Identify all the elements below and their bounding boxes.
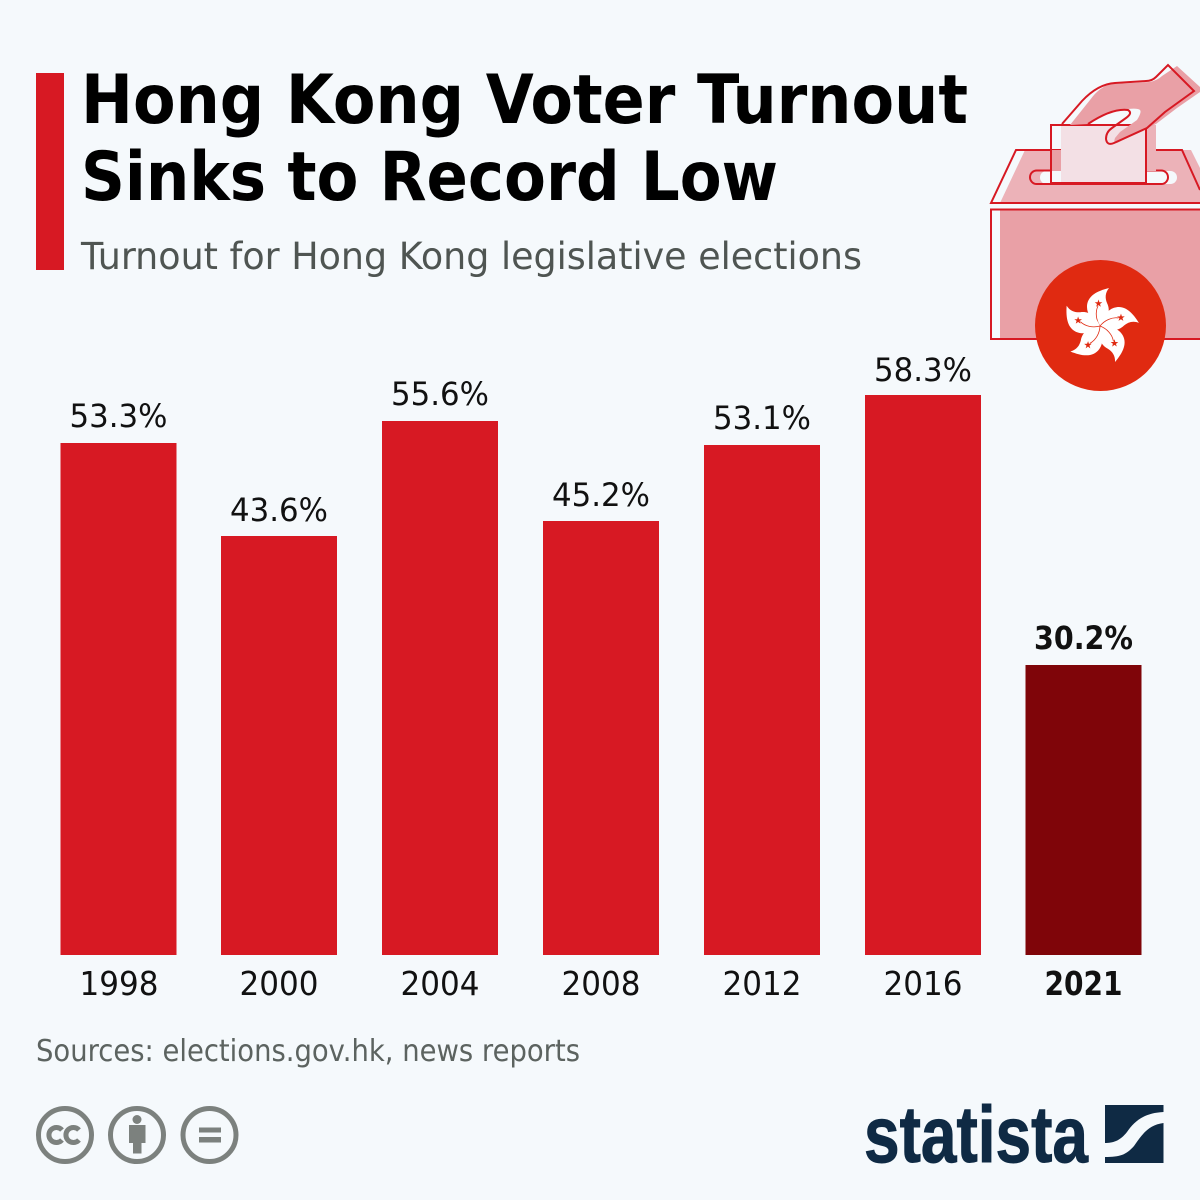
icon: attribution xyxy=(110,1108,164,1162)
bar: 2008: 45.2% xyxy=(552,476,650,514)
hand xyxy=(1062,65,1200,144)
bar: 2008: 2008 xyxy=(562,964,640,1003)
bar: 2000: 43.6% xyxy=(230,491,328,529)
bar: 2000: 2000 xyxy=(240,964,318,1003)
bar: 2016 xyxy=(865,351,981,1003)
statista logo xyxy=(864,1090,1164,1179)
subtitle: Turnout for Hong Kong legislative elections xyxy=(80,235,862,278)
bar: 2004: 55.6% xyxy=(391,375,489,413)
ballot slot xyxy=(1030,170,1177,184)
ballot paper xyxy=(1051,125,1156,183)
ballot box body xyxy=(991,210,1200,339)
icon: creative commons licence xyxy=(38,1108,236,1162)
bar: 2016: 58.3% xyxy=(874,351,972,389)
bar: 2021: 2021 xyxy=(1044,964,1122,1003)
ballot box lid xyxy=(991,150,1200,203)
bar: 2008 xyxy=(543,476,659,1003)
title: Hong Kong Voter Turnout xyxy=(81,61,968,140)
source note: Sources: elections.gov.hk, news reports xyxy=(36,1034,580,1069)
icon: Hong Kong flag xyxy=(1035,260,1166,391)
statista mark xyxy=(1105,1105,1164,1163)
title: Sinks to Record Low xyxy=(81,138,778,217)
icon: no derivatives xyxy=(183,1108,236,1162)
bar: 2016: 2016 xyxy=(884,964,962,1003)
bar: 2000 xyxy=(221,491,337,1003)
icon: cc xyxy=(38,1108,92,1162)
bar: 1998: 1998 xyxy=(80,964,158,1003)
bar: 2012: 53.1% xyxy=(713,399,811,437)
bar: 2021: 30.2% xyxy=(1034,619,1133,657)
bar: 1998: 53.3% xyxy=(70,397,168,435)
bar chart xyxy=(60,351,1142,1003)
bar: 2012 xyxy=(704,399,820,1003)
bar: 2004 xyxy=(382,375,498,1003)
title accent bar xyxy=(36,73,64,270)
bar: 1998 xyxy=(60,397,176,1003)
icon: ballot box with hand and Hong Kong flag xyxy=(991,65,1200,391)
bar: 2012: 2012 xyxy=(722,964,802,1003)
title xyxy=(81,61,968,217)
bar: 2004: 2004 xyxy=(400,964,480,1003)
statista wordmark: statista xyxy=(864,1090,1088,1179)
bar: 2021 xyxy=(1026,619,1142,1003)
